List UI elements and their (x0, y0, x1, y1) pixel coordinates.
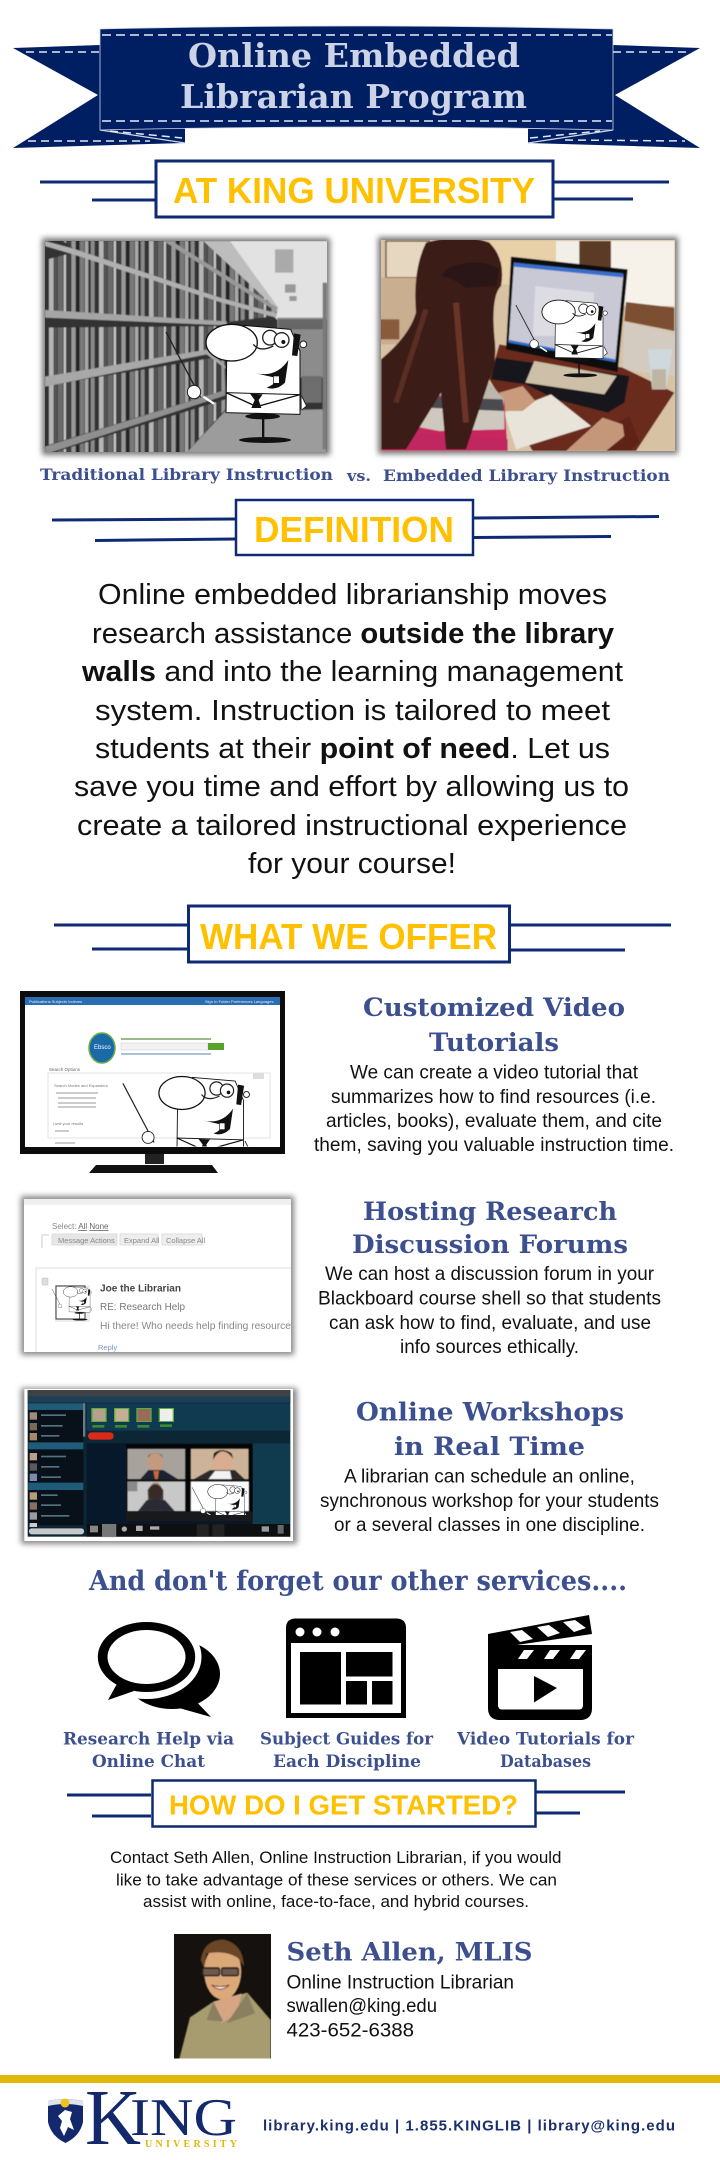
captions: traditional vs embedded (40, 465, 670, 485)
contact details: Online Instruction Librarian (286, 1972, 514, 1994)
discussion forum screenshot (21, 1196, 294, 1355)
portrait: Seth Allen (174, 1934, 271, 2060)
description (314, 1062, 674, 1156)
description: Blackboard course shell so that students (318, 1288, 661, 1310)
icon: clapperboard (488, 1615, 592, 1720)
discussion forum screenshot: Hi there! Who needs help finding resource (100, 1320, 291, 1332)
contact text (110, 1848, 562, 1911)
definition text: create a tailored instructional experience (77, 810, 627, 842)
panel: customized video tutorials (20, 991, 674, 1183)
title text: Online Embedded (188, 36, 520, 75)
contact details: swallen@king.edu (286, 1995, 437, 2017)
description (320, 1466, 659, 1536)
description: them, saving you valuable instruction time. (314, 1134, 674, 1156)
title text (180, 36, 527, 116)
heading: what we offer: WHAT WE OFFER (200, 916, 497, 957)
icon: chat bubbles (92, 1615, 220, 1717)
heading: definition: DEFINITION (254, 509, 454, 550)
captions: traditional vs embedded: vs. (346, 467, 371, 485)
monitor screenshot with mascot: Limit your results (53, 1121, 83, 1126)
heading: Customized Video (363, 993, 625, 1022)
heading (356, 1398, 624, 1461)
definition text: save you time and effort by allowing us to (74, 771, 629, 803)
heading: Hosting Research (363, 1197, 617, 1226)
contact details (286, 1938, 532, 2042)
service labels: Each Discipline (273, 1752, 421, 1772)
service labels: Video Tutorials for (456, 1730, 635, 1750)
contact details: 423-652-6388 (286, 2020, 414, 2042)
discussion forum screenshot: Reply (98, 1343, 117, 1352)
description: synchronous workshop for your students (320, 1490, 659, 1512)
icon: web page layout (286, 1618, 406, 1718)
heading: how do I get started (67, 1780, 625, 1826)
definition text: students at their point of need . Let us (95, 733, 610, 765)
service labels (63, 1730, 635, 1772)
definition text: research assistance outside the library (92, 618, 614, 650)
panel: online workshops in real time (21, 1388, 659, 1544)
description: info sources ethically. (400, 1336, 579, 1358)
description: summarizes how to find resources (i.e. (331, 1086, 656, 1108)
heading: Online Workshops (356, 1398, 624, 1426)
description: or a several classes in one discipline. (334, 1514, 645, 1536)
definition text: Online embedded librarianship moves (98, 579, 607, 611)
monitor screenshot with mascot: Search Options (49, 1067, 81, 1072)
heading: at King University (40, 161, 669, 217)
video conferencing screenshot (21, 1388, 297, 1544)
service labels: Subject Guides for (260, 1730, 434, 1750)
right ribbon tail (528, 45, 700, 148)
heading: how do I get started: HOW DO I GET STARTED? (169, 1790, 518, 1820)
discussion forum screenshot: Select: All None (52, 1222, 109, 1231)
King University logo: UNIVERSITY (145, 2139, 238, 2150)
photo: traditional library with mascot (40, 236, 333, 456)
King University logo: K (85, 2075, 141, 2160)
description: can ask how to find, evaluate, and use (329, 1312, 651, 1334)
description: articles, books), evaluate them, and cite (326, 1110, 662, 1132)
discussion forum screenshot: Collapse All (166, 1236, 206, 1245)
service labels: Online Chat (92, 1752, 205, 1772)
heading: at King University: AT KING UNIVERSITY (173, 170, 535, 211)
gold divider (0, 2075, 720, 2083)
definition text: walls and into the learning management (81, 656, 623, 688)
heading: other services: And don't forget our other services.... (88, 1566, 627, 1597)
King University logo: ING (130, 2089, 237, 2147)
discussion forum screenshot: RE: Research Help (100, 1301, 185, 1313)
contact text: Contact Seth Allen, Online Instruction Librarian, if you would (110, 1848, 562, 1867)
heading: in Real Time (394, 1432, 585, 1461)
service labels: Databases (500, 1752, 591, 1772)
definition text (74, 579, 629, 880)
title text: Librarian Program (180, 77, 527, 116)
discussion forum screenshot: Expand All (124, 1236, 160, 1245)
icon: shield (48, 2098, 83, 2143)
monitor screenshot with mascot: Sign In Folder Preferences Languages (205, 999, 274, 1004)
monitor screenshot with mascot (20, 991, 285, 1183)
heading: what we offer (54, 906, 671, 962)
definition text: system. Instruction is tailored to meet (95, 695, 610, 727)
ribbon centre (100, 26, 613, 130)
monitor screenshot with mascot: Publications Subjects Indexes (29, 999, 82, 1004)
discussion forum screenshot: Message Actions (58, 1236, 115, 1245)
monitor screenshot with mascot: Search Modes and Expanders (54, 1083, 108, 1088)
description (318, 1263, 661, 1358)
discussion forum screenshot: Joe the Librarian (100, 1282, 181, 1294)
heading: definition (52, 500, 659, 555)
photo: student at computer with mascot on screen (376, 236, 680, 456)
captions: traditional vs embedded: Embedded Library Instruction (383, 466, 670, 485)
panel: hosting research discussion forums (21, 1196, 661, 1358)
heading (352, 1197, 628, 1259)
definition text: for your course! (248, 848, 456, 880)
heading (363, 993, 625, 1057)
monitor screenshot with mascot: Ebsco (94, 1045, 111, 1051)
captions: traditional vs embedded: Traditional Library Instruction (40, 465, 333, 484)
contact text: like to take advantage of these services or others. We can (116, 1870, 557, 1890)
footer contact line: library.king.edu | 1.855.KINGLIB | library@king.edu (263, 2118, 675, 2134)
service labels: Research Help via (63, 1730, 234, 1750)
description: We can create a video tutorial that (350, 1062, 639, 1084)
contact details: Seth Allen, MLIS (286, 1938, 532, 1966)
description: A librarian can schedule an online, (344, 1466, 635, 1488)
contact text: assist with online, face-to-face, and hybrid courses. (143, 1892, 529, 1911)
heading: Tutorials (429, 1028, 559, 1057)
title banner (13, 26, 700, 148)
King University logo (48, 2075, 238, 2160)
heading: Discussion Forums (352, 1230, 628, 1259)
description: We can host a discussion forum in your (325, 1263, 654, 1285)
left ribbon tail (13, 45, 185, 148)
